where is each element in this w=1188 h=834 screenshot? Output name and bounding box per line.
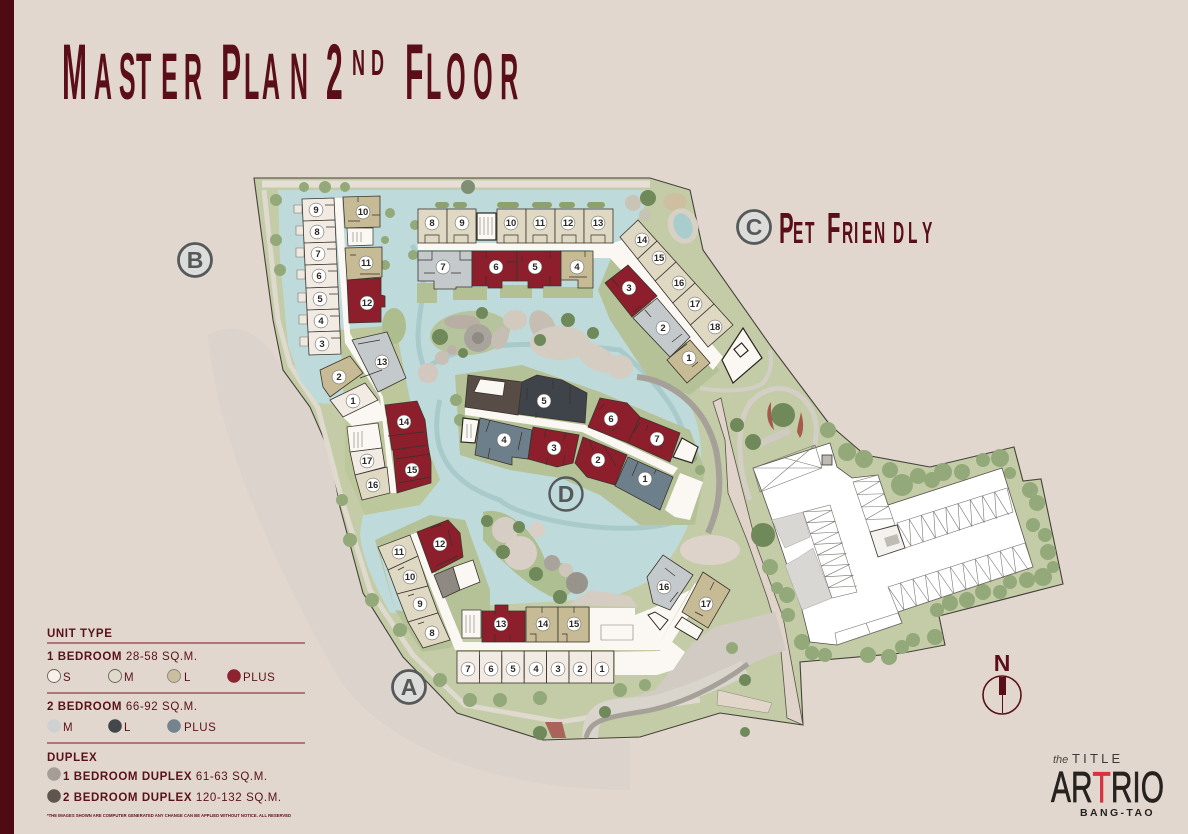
unit B13: 13	[377, 357, 387, 368]
unit A14: 14	[538, 619, 549, 630]
unit B3: 3	[319, 339, 325, 350]
logo: TITLE	[1072, 751, 1123, 766]
unit B13	[352, 332, 406, 392]
unit A15: 15	[569, 619, 580, 630]
unit C8	[418, 209, 447, 243]
unit C17	[673, 283, 714, 325]
unit D1: 1	[642, 474, 648, 485]
unit A3	[547, 651, 569, 683]
unit A7: 7	[465, 664, 471, 675]
unit A8: 8	[429, 628, 435, 639]
unit C2	[633, 298, 690, 357]
logo: ARTRIO	[1051, 762, 1164, 811]
title: ASTER	[94, 40, 202, 114]
title: LAN	[244, 40, 308, 114]
unit C14: 14	[637, 235, 648, 246]
unit A2	[569, 651, 591, 683]
unit A8	[408, 613, 450, 648]
unit D5	[518, 375, 587, 423]
unit C13: 13	[593, 218, 603, 229]
unit A3: 3	[555, 664, 561, 675]
unit B14	[385, 401, 428, 450]
unit D6: 6	[608, 414, 614, 425]
unit C2: 2	[660, 323, 666, 334]
building D units	[465, 375, 680, 510]
unit A12: 12	[435, 539, 445, 550]
left brand bar	[0, 0, 14, 834]
unit C10	[497, 209, 526, 243]
pet friendly label: RIENDLY	[842, 216, 932, 251]
unit C1: 1	[686, 353, 692, 364]
two bedroom row: L	[124, 722, 131, 734]
unit C11	[526, 209, 555, 243]
unit A4: 4	[533, 664, 539, 675]
unit B11	[345, 247, 382, 280]
unit B2	[320, 356, 363, 397]
unit C16: 16	[674, 278, 684, 289]
legend panel	[47, 628, 305, 818]
unit B1	[330, 383, 378, 417]
unit B9: 9	[313, 205, 319, 216]
duplex rows: 2 BEDROOM DUPLEX 120-132 SQ.M.	[63, 792, 282, 804]
unit A10: 10	[405, 572, 415, 583]
unit C12	[555, 209, 584, 243]
unit A5: 5	[510, 664, 516, 675]
unit B14: 14	[399, 417, 410, 428]
grey ring path	[637, 377, 719, 533]
one bedroom row: M	[124, 672, 134, 684]
land patches below north block	[417, 283, 593, 303]
unit D6	[588, 398, 640, 443]
unit A13	[482, 605, 525, 642]
icon: north compass	[983, 650, 1021, 714]
unit C10: 10	[506, 218, 516, 229]
unit C3	[605, 265, 657, 317]
unit B7	[304, 242, 337, 265]
title: M	[62, 28, 87, 116]
unit A17	[682, 572, 730, 628]
road tint west of site	[208, 328, 630, 790]
marker B	[178, 244, 212, 276]
unit D1	[615, 457, 673, 510]
title: 2	[326, 28, 343, 116]
unit A2: 2	[577, 664, 583, 675]
unit B10: 10	[358, 207, 368, 218]
unit A9	[397, 586, 438, 622]
unit A1	[591, 651, 614, 683]
unit C7: 7	[440, 262, 446, 273]
corridors	[334, 198, 723, 675]
north lake garden	[418, 305, 633, 383]
unit A6: 6	[488, 664, 494, 675]
unit B6: 6	[316, 271, 322, 282]
unit D7: 7	[654, 434, 660, 445]
building B west row balconies	[294, 205, 308, 346]
parking building	[753, 443, 1033, 645]
unit D3: 3	[551, 443, 557, 454]
unit D4	[475, 418, 532, 465]
duplex rows: DUPLEX	[47, 752, 97, 764]
marker D: D	[558, 481, 574, 507]
pet friendly label: ET	[793, 216, 814, 251]
unit C6: 6	[493, 262, 499, 273]
pool deck oval	[680, 535, 740, 565]
two bedroom row: 2 BEDROOM 66-92 SQ.M.	[47, 701, 198, 713]
water	[278, 190, 701, 613]
title: LOOR	[426, 40, 518, 114]
unit B16: 16	[368, 480, 378, 491]
unit B17	[350, 448, 385, 475]
unit B11: 11	[361, 258, 372, 269]
unit A17: 17	[701, 599, 711, 610]
marker B: B	[187, 247, 203, 273]
unit C7	[418, 251, 472, 289]
building A units	[378, 520, 730, 683]
unit A1: 1	[599, 664, 605, 675]
unit A7	[457, 651, 479, 683]
site ground	[254, 178, 1063, 740]
north east garden	[625, 190, 816, 500]
one bedroom row	[47, 651, 275, 684]
building C units	[418, 209, 733, 383]
pet friendly label: P	[779, 205, 794, 253]
title: ND	[352, 43, 384, 84]
unit B4	[307, 309, 340, 332]
unit C18	[690, 304, 733, 347]
unit D2	[575, 437, 627, 485]
two bedroom row	[47, 701, 216, 734]
unit B9	[302, 198, 335, 221]
master plan site	[254, 178, 1063, 740]
unit A5	[502, 651, 524, 683]
unit A16	[647, 555, 693, 610]
unit B17: 17	[362, 456, 372, 467]
icon: north compass: N	[994, 650, 1010, 676]
unit B7: 7	[315, 249, 321, 260]
marker D	[550, 478, 582, 510]
stair cores	[347, 213, 762, 640]
two bedroom row: M	[63, 722, 73, 734]
unit D4: 4	[501, 435, 507, 446]
unit B4: 4	[318, 316, 324, 327]
entry road	[713, 398, 803, 725]
pet friendly label	[779, 205, 932, 253]
south lake garden	[481, 511, 638, 607]
unit B10	[343, 196, 380, 228]
unit A10	[388, 556, 428, 594]
title: P	[221, 28, 241, 116]
building B units	[302, 196, 431, 500]
unit A15	[558, 607, 589, 642]
title: F	[405, 28, 423, 116]
unit C14	[620, 220, 657, 259]
land around west block	[340, 325, 440, 515]
marker A	[392, 670, 426, 704]
parking stalls	[753, 445, 1033, 645]
duplex rows	[47, 752, 282, 804]
unit C13	[584, 209, 613, 243]
pet friendly label: F	[827, 205, 840, 253]
drop-off paving	[610, 612, 786, 705]
two bedroom row: PLUS	[184, 722, 216, 734]
duplex rows: 1 BEDROOM DUPLEX 61-63 SQ.M.	[63, 771, 268, 783]
unit B16	[355, 467, 390, 500]
legend heading: UNIT TYPE	[47, 628, 112, 640]
marker A: A	[401, 674, 417, 700]
unit C15: 15	[654, 253, 665, 264]
unit A9: 9	[417, 599, 423, 610]
interior unit walls	[325, 197, 714, 679]
unit B6	[305, 264, 338, 288]
one bedroom row: 1 BEDROOM 28-58 SQ.M.	[47, 651, 198, 663]
unit C1	[667, 340, 710, 383]
unit B8	[303, 220, 336, 243]
unit A11: 11	[394, 547, 405, 558]
land around centre block	[455, 365, 705, 525]
one bedroom row: PLUS	[243, 672, 275, 684]
unit C4	[561, 251, 593, 288]
unit B15	[393, 445, 431, 493]
unit C15	[638, 241, 676, 281]
unit B5	[306, 287, 339, 310]
unit B3	[308, 331, 341, 355]
unit B12	[347, 278, 385, 323]
unit A6	[479, 651, 502, 683]
logo: BANG-TAO	[1080, 807, 1155, 819]
landscape trees	[270, 180, 1059, 740]
unit B8: 8	[314, 227, 320, 238]
unit C6	[472, 251, 517, 288]
unit B2: 2	[336, 372, 342, 383]
unit A16: 16	[659, 582, 669, 593]
1 bedroom duplex	[434, 560, 480, 598]
disclaimer: *THE IMAGES SHOWN ARE COMPUTER GENERATED ANY CHANGE CAN BE APPLIED WITHOUT NOTICE. ALL RESERVED	[47, 813, 291, 818]
unit A14	[526, 607, 558, 642]
unit C9	[447, 209, 476, 243]
unit C4: 4	[574, 262, 580, 273]
unit C17: 17	[690, 299, 700, 310]
unit A13: 13	[496, 619, 506, 630]
unit A4	[524, 651, 547, 683]
unit A11	[378, 535, 418, 570]
unit D3	[528, 427, 579, 467]
logo: the	[1053, 754, 1068, 766]
unit D7	[628, 417, 680, 462]
unit C5	[517, 251, 561, 288]
unit B5: 5	[317, 294, 323, 305]
land around block C south wing	[598, 256, 720, 395]
marker C	[738, 210, 770, 244]
unit C8: 8	[429, 218, 435, 229]
unit A12	[417, 520, 463, 573]
unit B15: 15	[407, 465, 418, 476]
unit C12: 12	[563, 218, 573, 229]
title	[62, 28, 518, 116]
one bedroom row: L	[184, 672, 191, 684]
unit D5: 5	[541, 396, 547, 407]
2 bedroom duplex	[465, 375, 522, 415]
one bedroom row: S	[63, 672, 71, 684]
unit B1: 1	[350, 396, 356, 407]
unit C3: 3	[626, 283, 632, 294]
unit C16	[655, 262, 695, 303]
unit C18: 18	[710, 322, 720, 333]
parking core	[870, 525, 905, 557]
unit C9: 9	[459, 218, 465, 229]
land around south block	[375, 515, 490, 652]
unit C5: 5	[532, 262, 538, 273]
marker C: C	[746, 214, 762, 240]
unit C11: 11	[535, 218, 546, 229]
unit B12: 12	[362, 298, 372, 309]
unit D2: 2	[595, 455, 601, 466]
